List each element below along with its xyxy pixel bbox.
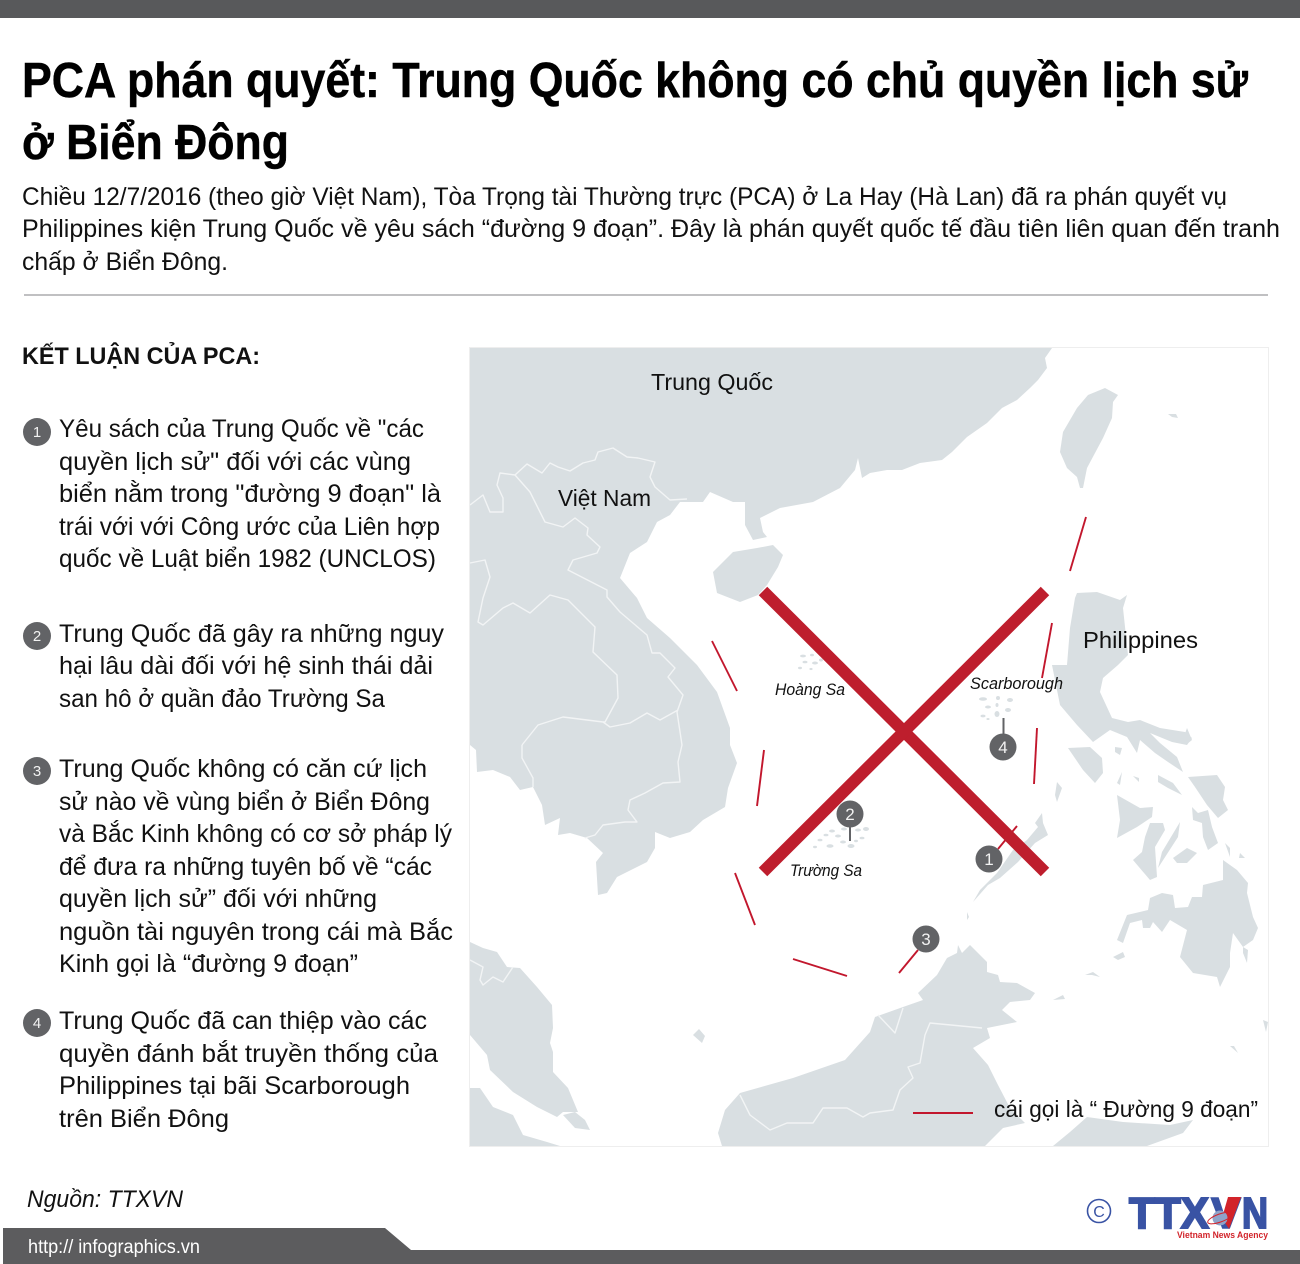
map labels: Trung Quốc	[651, 369, 773, 395]
title	[22, 54, 1248, 170]
logo: TTXVN: V	[1211, 1190, 1241, 1238]
nine-dash line	[712, 517, 1086, 976]
islands: Trường Sa	[813, 827, 869, 848]
map labels: Philippines	[1083, 627, 1198, 653]
conclusion 4: Trung Quốc đã can thiệp vào các	[59, 1007, 427, 1035]
conclusion 3: và Bắc Kinh không có cơ sở pháp lý	[59, 819, 452, 848]
conclusion 3: Trung Quốc không có căn cứ lịch	[59, 755, 427, 783]
conclusion 2: 2	[33, 628, 41, 645]
islands: Scarborough	[979, 696, 1013, 720]
intro text: Chiều 12/7/2016 (theo giờ Việt Nam), Tòa Trọng tài Thường trực (PCA) ở La Hay (Hà Lan) đã ra phán quyết vụ	[22, 183, 1227, 211]
title: ở Biển Đông	[22, 116, 289, 170]
conclusion 3: để đưa ra những tuyên bố về “các	[59, 853, 432, 881]
conclusion 3: 3	[33, 763, 41, 780]
map labels	[558, 369, 1198, 880]
conclusion 2	[23, 620, 444, 713]
marker 2	[836, 800, 864, 841]
conclusion 3: nguồn tài nguyên trong cái mà Bắc	[59, 917, 453, 946]
conclusion 3: quyền lịch sử” đối với những	[59, 885, 377, 913]
logo: TTXVN: TTX	[1129, 1190, 1209, 1238]
logo: TTXVN	[1088, 1190, 1268, 1240]
intro text	[22, 183, 1280, 276]
section heading: KẾT LUẬN CỦA PCA:	[22, 341, 260, 370]
conclusion 1: 1	[33, 424, 41, 441]
marker 2: 2	[845, 805, 855, 824]
map panel	[470, 348, 1268, 1146]
marker 4	[990, 718, 1016, 760]
conclusion 4	[23, 1007, 438, 1133]
conclusion 1: Yêu sách của Trung Quốc về "các	[59, 415, 424, 443]
conclusion 4: Philippines tại bãi Scarborough	[59, 1072, 410, 1100]
intro text: Philippines kiện Trung Quốc về yêu sách “đường 9 đoạn”. Đây là phán quyết quốc tế đầu tiên liên quan đến tranh	[22, 215, 1280, 243]
islands: Hoàng Sa	[798, 654, 823, 670]
marker 3: 3	[921, 930, 931, 949]
marker 4: 4	[998, 738, 1008, 757]
marker 1: 1	[984, 850, 994, 869]
conclusion 3: sử nào về vùng biển ở Biển Đông	[59, 788, 430, 816]
map labels: Việt Nam	[558, 485, 651, 511]
marker 3	[912, 926, 940, 952]
conclusion 1: trái với với Công ước của Liên hợp	[59, 513, 440, 541]
intro text: chấp ở Biển Đông.	[22, 248, 228, 276]
logo: TTXVN: N	[1242, 1190, 1268, 1238]
map labels: Hoàng Sa	[775, 681, 845, 699]
land masses	[470, 348, 1268, 1146]
conclusion 3	[23, 755, 453, 978]
conclusion 1	[23, 415, 441, 573]
conclusion 4: quyền đánh bắt truyền thống của	[59, 1039, 438, 1068]
conclusion 1: quốc về Luật biển 1982 (UNCLOS)	[59, 545, 436, 573]
red cross	[763, 591, 1045, 872]
map labels: Scarborough	[970, 675, 1063, 693]
conclusion 1: biển nằm trong "đường 9 đoạn" là	[59, 479, 441, 508]
marker 1	[976, 846, 1002, 872]
conclusion 3: Kinh gọi là “đường 9 đoạn”	[59, 950, 358, 978]
footer bar: http:// infographics.vn	[28, 1237, 200, 1258]
conclusion 1: quyền lịch sử" đối với các vùng	[59, 448, 411, 476]
conclusion 2: Trung Quốc đã gây ra những nguy	[59, 620, 444, 648]
logo: TTXVN: C	[1093, 1204, 1105, 1221]
logo: TTXVN: Vietnam News Agency	[1177, 1230, 1268, 1240]
footer bar	[3, 1228, 1300, 1264]
legend: cái gọi là “ Đường 9 đoạn”	[994, 1096, 1258, 1122]
conclusion 4: 4	[33, 1015, 41, 1032]
top bar	[0, 0, 1300, 18]
conclusion 2: hại lâu dài đối với hệ sinh thái dải	[59, 652, 433, 680]
conclusion 2: san hô ở quần đảo Trường Sa	[59, 685, 385, 713]
source: Nguồn: TTXVN	[27, 1186, 184, 1213]
map labels: Trường Sa	[790, 862, 862, 880]
country borders	[470, 448, 982, 1130]
conclusion 4: trên Biển Đông	[59, 1105, 229, 1133]
